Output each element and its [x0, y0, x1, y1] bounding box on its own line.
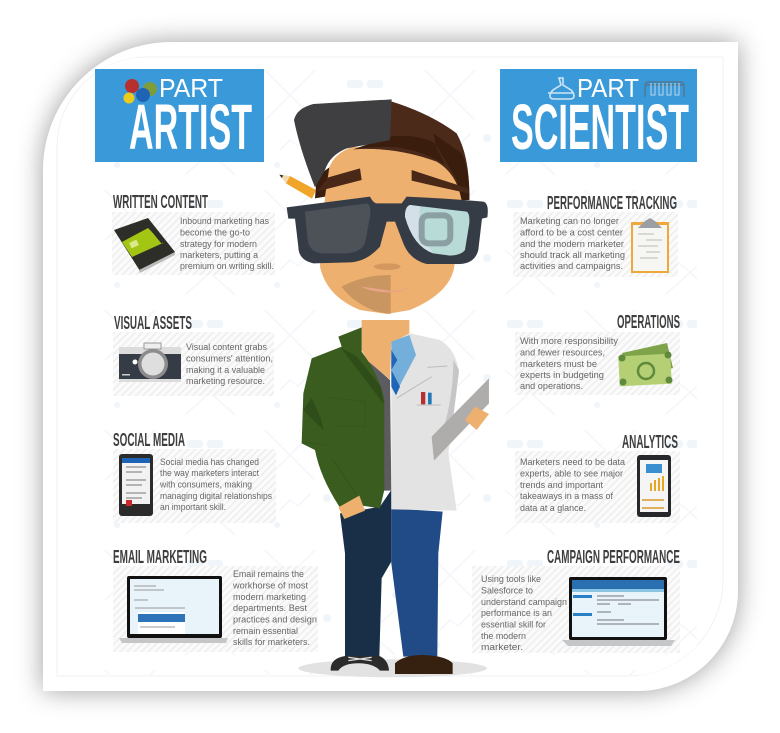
panel: Part Artist banner	[95, 69, 264, 163]
text block: workhorse of most	[232, 580, 308, 590]
text block: activities and campaigns.	[520, 261, 623, 271]
eyebrows	[317, 168, 362, 192]
text block: Salesforce to	[481, 586, 533, 596]
text block: with consumers, making	[159, 480, 252, 490]
beard	[342, 275, 391, 314]
text block: and fewer resources,	[520, 348, 605, 358]
section: Visual Assets	[114, 312, 273, 386]
banner small word: PART	[159, 73, 223, 103]
white lab coat	[391, 333, 459, 511]
icon: banknotes	[618, 343, 673, 386]
text block: Visual content grabs	[186, 342, 267, 352]
text block: understand campaign	[481, 597, 567, 607]
text block: the modern	[481, 631, 526, 641]
inner rounded outline	[57, 57, 723, 676]
heading: OPERATIONS	[617, 311, 680, 332]
text block: marketer.	[481, 642, 523, 652]
patterned background	[95, 58, 697, 675]
section: Operations	[520, 311, 680, 391]
text block: making it a valuable	[186, 365, 265, 375]
text block: modern marketing	[233, 592, 306, 602]
illustration: half artist, half scientist character	[279, 99, 489, 677]
text block	[159, 457, 272, 512]
section: Social Media	[113, 429, 272, 516]
text block	[186, 342, 273, 386]
text block	[520, 457, 626, 513]
heading: ANALYTICS	[622, 431, 678, 452]
icon: clipboard	[631, 218, 669, 273]
text block: trends and important	[520, 480, 603, 490]
text block: Using tools like	[481, 574, 541, 584]
face	[320, 147, 462, 314]
text block: an important skill.	[160, 502, 226, 512]
text block: and operations.	[520, 381, 583, 391]
icon: notebook	[114, 218, 175, 273]
hair	[353, 101, 469, 200]
text block: Email remains the	[233, 569, 304, 579]
text block: skills for marketers.	[233, 637, 310, 647]
pencil	[279, 175, 316, 199]
text block: practices and design	[233, 614, 317, 624]
green jacket	[302, 327, 384, 508]
text block: essential skill for	[481, 620, 546, 630]
heading: VISUAL ASSETS	[114, 312, 192, 333]
right hand	[465, 407, 489, 430]
shoe: brown right shoe	[395, 655, 453, 674]
banner big word: ARTIST	[129, 91, 252, 163]
ground shadow	[298, 659, 487, 677]
text block: consumers' attention,	[186, 354, 273, 364]
heading: SOCIAL MEDIA	[113, 429, 185, 450]
text block	[520, 216, 625, 271]
left hand in pocket	[338, 496, 365, 519]
clipboard	[432, 378, 489, 461]
collar and tie	[391, 335, 416, 395]
section: Campaign Performance	[481, 546, 680, 652]
icon: laptop with dashboard	[562, 577, 675, 646]
text block: takeaways in a mass of	[520, 491, 613, 501]
pens in pocket	[421, 392, 432, 404]
banner small word: PART	[577, 73, 639, 103]
text block: performance is an	[481, 608, 552, 618]
hatched panels behind each text block	[112, 212, 680, 653]
text block: experts in budgeting	[520, 370, 604, 380]
text block: marketers, putting a	[180, 250, 259, 260]
icon: paint splats	[124, 79, 157, 104]
section: Performance Tracking	[520, 192, 677, 273]
frame: white card with rounded corners and shadow	[43, 42, 738, 691]
text block: premium on writing skill.	[180, 261, 274, 271]
text block: departments. Best	[233, 603, 307, 613]
shoe: left sneaker	[331, 656, 389, 671]
text block: marketers must be	[520, 359, 597, 369]
icon: laptop with email campaign	[119, 576, 228, 643]
text block: marketing resource.	[186, 376, 265, 386]
neck	[362, 320, 409, 379]
text block: With more responsibility	[520, 336, 618, 346]
section: Written Content	[113, 191, 274, 273]
cap	[294, 99, 392, 187]
body	[298, 320, 489, 677]
icon: tablet with charts	[637, 455, 671, 517]
shirt	[367, 360, 391, 491]
heading: EMAIL MARKETING	[113, 546, 207, 567]
section: Analytics	[520, 431, 678, 517]
nose	[374, 263, 401, 270]
text block: and the modern marketer	[520, 239, 624, 249]
section: Email Marketing	[113, 546, 317, 647]
panel: Part Scientist banner	[500, 69, 697, 163]
text block	[180, 216, 274, 271]
text block: become the go-to	[180, 228, 250, 238]
text block: experts, able to see major	[520, 468, 623, 478]
icon: phone	[119, 454, 153, 516]
text block	[232, 569, 317, 647]
text block: afford to be a cost center	[520, 228, 623, 238]
text block	[520, 336, 618, 391]
icon: flask	[548, 78, 574, 99]
text block: Marketing can no longer	[520, 216, 619, 226]
text block: Marketers need to be data	[520, 457, 626, 467]
infographic artwork	[56, 56, 724, 678]
text block	[481, 574, 567, 652]
text block: the way marketers interact	[160, 468, 259, 478]
text block: should track all marketing	[520, 250, 625, 260]
text block: strategy for modern	[180, 239, 257, 249]
glasses	[287, 197, 488, 264]
jeans: blue right leg	[391, 508, 443, 657]
head	[279, 99, 488, 314]
icon: camera	[119, 343, 181, 382]
text block: managing digital relationships	[160, 491, 272, 501]
icon: test tube rack	[645, 82, 684, 97]
jeans: dark left leg	[340, 490, 391, 657]
heading: WRITTEN CONTENT	[113, 191, 208, 212]
text block: remain essential	[233, 626, 298, 636]
mouth	[361, 286, 412, 292]
text block: Inbound marketing has	[180, 216, 269, 226]
text block: Social media has changed	[160, 457, 259, 467]
text block: data at a glance.	[520, 503, 586, 513]
